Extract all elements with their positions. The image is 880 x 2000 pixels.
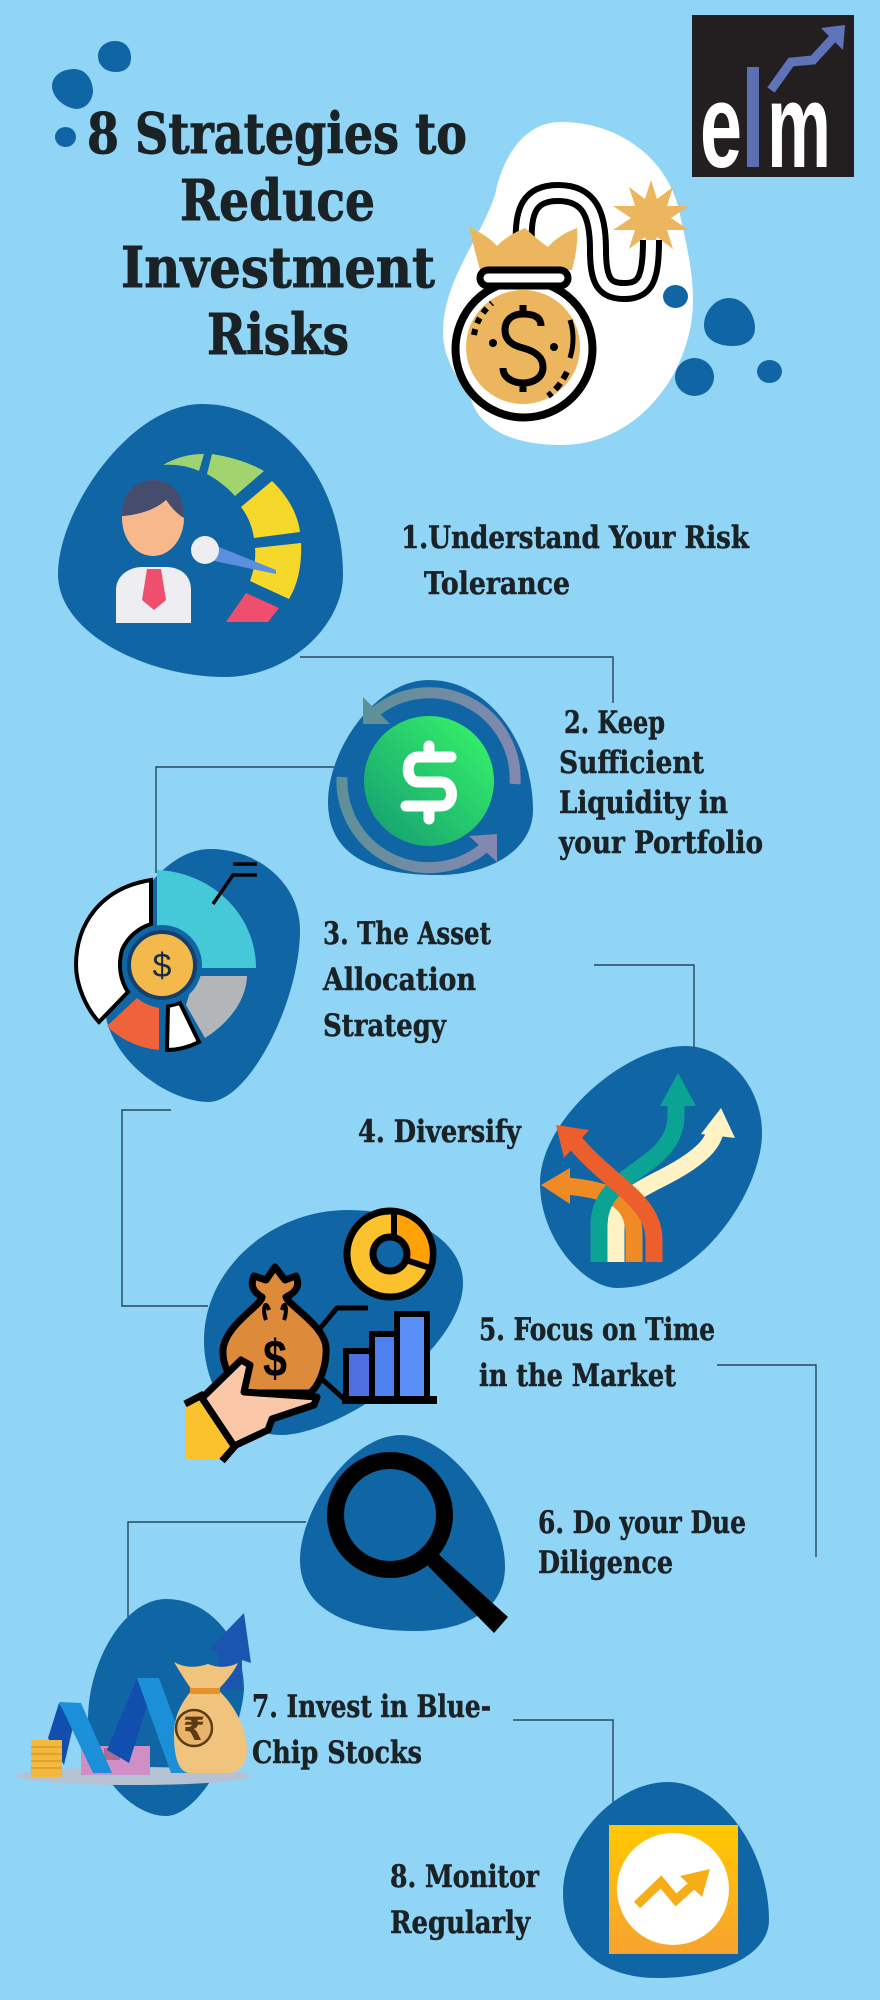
text: step 5 [479, 1312, 715, 1394]
blob: step 8 [563, 1782, 769, 1978]
text: step 1: Tolerance [424, 566, 570, 602]
text: step 3: Allocation [322, 962, 476, 998]
text: step 7 [252, 1689, 491, 1771]
connector: step 5 to 6 [717, 1365, 816, 1557]
text: step 2: Sufficient [559, 745, 705, 781]
text: step 5: 5. Focus on Time [479, 1312, 715, 1348]
text: step 2 [558, 705, 763, 861]
title: Reduce [180, 168, 375, 234]
decorative blobs: right of bag [663, 285, 782, 396]
icon: dollar cycle [342, 693, 515, 868]
logo: elm [692, 15, 854, 193]
text: step 7: Chip Stocks [252, 1735, 422, 1771]
blob: step 4 [540, 1046, 762, 1288]
connector: step 7 to 8 [513, 1720, 613, 1803]
text: step 1 [401, 520, 750, 602]
text: step 6: Diligence [538, 1545, 673, 1581]
text: step 2: Liquidity in [559, 785, 728, 821]
icon: allocation pie chart [76, 864, 257, 1050]
icon: money bag in hand with charts [185, 1211, 437, 1461]
white blob behind money bag [443, 122, 693, 445]
blob: step 3 [104, 849, 300, 1102]
blob: step 6 [300, 1435, 505, 1631]
connector: step 3 to 4 [594, 965, 694, 1047]
title: Risks [207, 302, 349, 368]
logo: elm: e [700, 59, 742, 193]
icon: allocation pie chart: $ [153, 947, 172, 985]
text: step 4: 4. Diversify [358, 1114, 522, 1150]
text: step 3: 3. The Asset [323, 916, 492, 952]
icon: risk gauge and person [116, 454, 301, 623]
text: step 6 [538, 1505, 746, 1581]
title: 8 Strategies to [87, 101, 467, 167]
text: step 7: 7. Invest in Blue- [252, 1689, 491, 1725]
logo: elm: m [767, 59, 831, 193]
decorative blobs: top left [52, 41, 131, 147]
connector: step 1 to 2 [300, 657, 613, 703]
blob: step 5 [204, 1210, 463, 1435]
icon: diverging arrows [541, 1073, 735, 1262]
text: step 8: 8. Monitor [390, 1859, 540, 1895]
blob: step 1 [58, 404, 343, 677]
icon: magnifying glass [336, 1460, 508, 1633]
title [87, 101, 467, 368]
title: Investment [121, 235, 435, 301]
connector: step 6 to 7 [128, 1522, 306, 1617]
text: step 1: 1.Understand Your Risk [401, 520, 750, 556]
text: step 2: 2. Keep [564, 705, 665, 741]
blob: step 7 [88, 1599, 244, 1816]
connector: step 2 to 3 [156, 767, 334, 873]
icon: monitoring trend [609, 1825, 738, 1954]
text: step 5: in the Market [479, 1358, 677, 1394]
icon: money bag [456, 180, 689, 418]
icon: money bag in hand with charts: $ [263, 1330, 287, 1388]
text: step 8: Regularly [390, 1905, 531, 1941]
blob: step 2 [328, 680, 533, 875]
icon: blue-chip growth chart with rupee bag: ₹ [183, 1710, 205, 1748]
text: step 2: your Portfolio [558, 825, 763, 861]
connector: step 4 to 5 [122, 1110, 208, 1306]
icon: blue-chip growth chart with rupee bag [16, 1613, 251, 1785]
text: step 3: Strategy [323, 1008, 447, 1044]
text: step 8 [390, 1859, 540, 1941]
text: step 6: 6. Do your Due [538, 1505, 746, 1541]
text: step 3 [322, 916, 492, 1044]
